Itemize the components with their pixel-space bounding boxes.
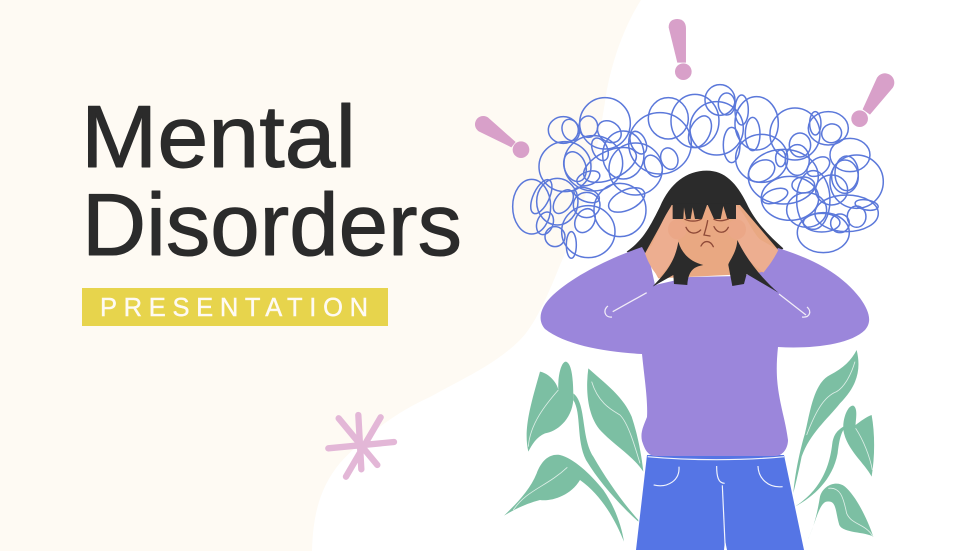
- leaf veins: [513, 382, 640, 510]
- right hand: [735, 205, 778, 273]
- title: [81, 87, 462, 274]
- banner bar: [82, 288, 388, 326]
- head details: [645, 203, 778, 293]
- upper right leaf: [587, 368, 643, 472]
- icon: pink asterisk: [328, 415, 394, 477]
- banner text: PRESENTATION: [100, 294, 368, 322]
- right plant: [793, 350, 874, 542]
- left plant: [504, 362, 643, 542]
- plant stem: [573, 393, 638, 522]
- title line 2: Disorders: [82, 175, 462, 274]
- hair strand left: [653, 242, 703, 287]
- left cheek: [668, 219, 687, 239]
- top leaf: [793, 350, 858, 493]
- left hand: [645, 206, 678, 277]
- subtitle banner: [82, 288, 388, 326]
- face features: [685, 219, 728, 247]
- shorts: [636, 455, 804, 550]
- right sleeve crease: [779, 294, 810, 317]
- hair back: [627, 171, 783, 278]
- shorts seams and pockets: [648, 457, 784, 550]
- neck and face: [645, 205, 778, 278]
- left sleeve crease: [605, 293, 647, 317]
- icon: right exclamation mark: [851, 73, 894, 127]
- tangled thought scribble: [513, 85, 883, 258]
- lower leaf: [504, 455, 624, 542]
- leaf veins: [807, 362, 873, 536]
- cream background blob: [0, 0, 641, 551]
- right cheek: [727, 219, 746, 239]
- stem with paired leaves: [795, 406, 874, 507]
- bottom leaf: [807, 484, 873, 542]
- title line 1: Mental: [81, 87, 356, 186]
- woman figure: [541, 171, 869, 550]
- bangs: [673, 203, 736, 219]
- icon: left exclamation mark: [475, 116, 529, 158]
- sweater: [541, 247, 869, 456]
- upper left leaves: [527, 362, 573, 452]
- hair strand right: [728, 240, 778, 293]
- shorts body: [636, 455, 804, 550]
- icon: top exclamation mark: [669, 19, 692, 80]
